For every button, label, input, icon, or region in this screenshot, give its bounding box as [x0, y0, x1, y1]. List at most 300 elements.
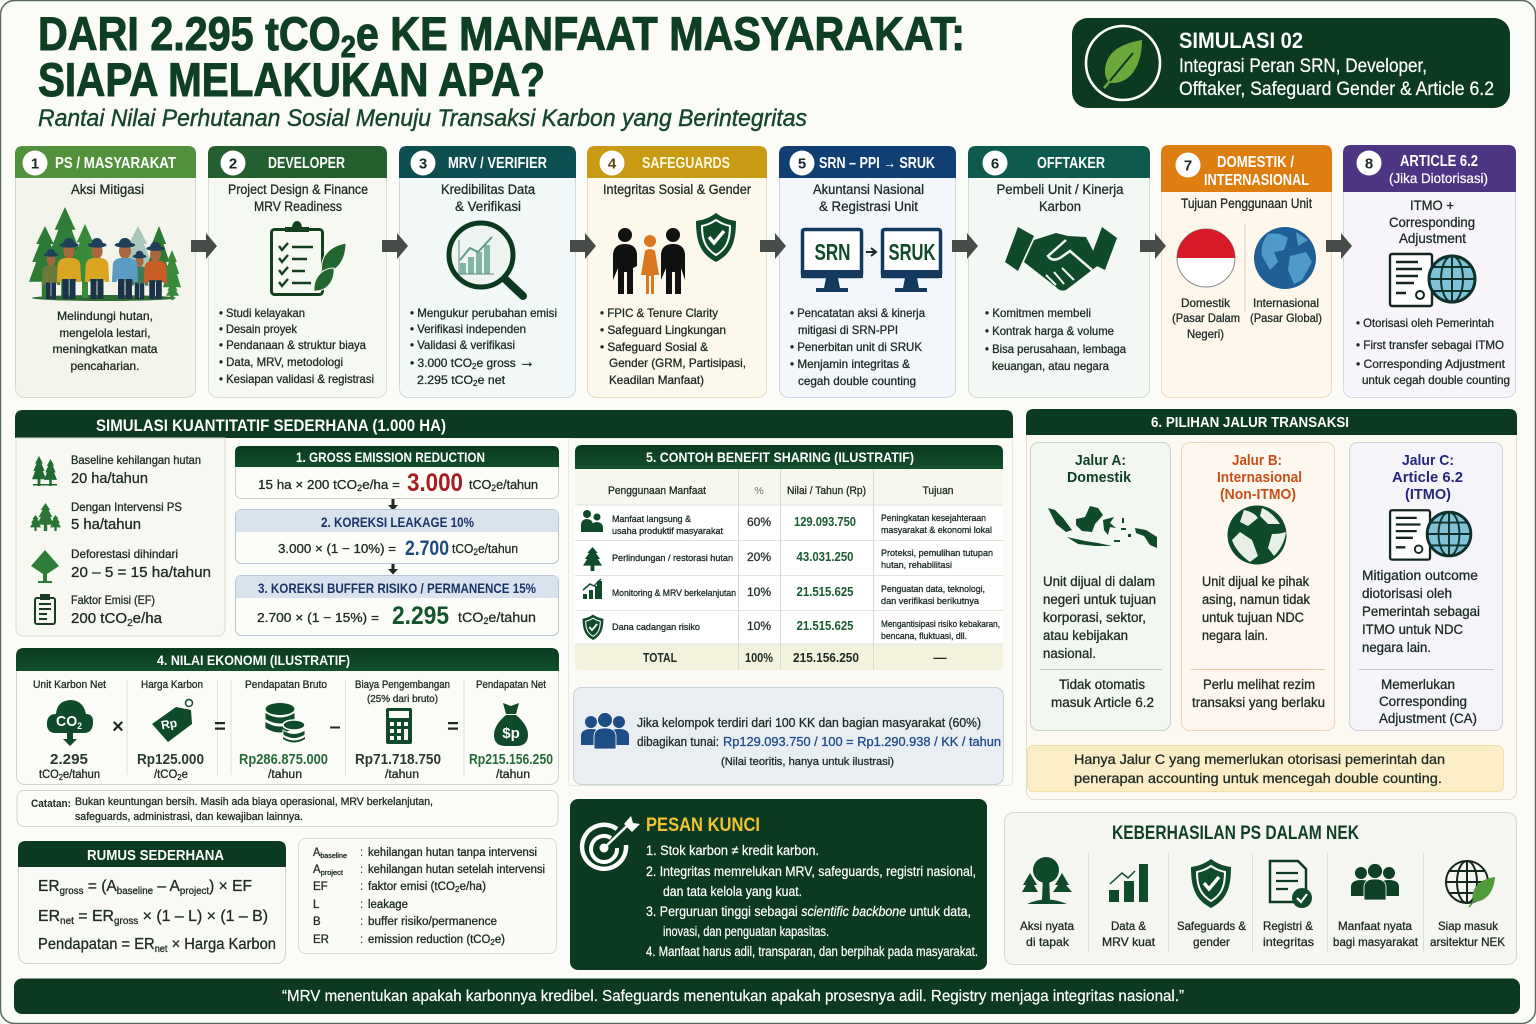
panel: 3 MRV / Verifier: & Verifikasi — [455, 199, 521, 214]
table: benefit sharing: 215.156.250 — [793, 650, 859, 665]
table: benefit sharing: masyarakat & ekonomi lokal — [881, 525, 992, 536]
table: benefit sharing: % — [754, 485, 764, 497]
arrow — [388, 564, 398, 574]
card: jalur A: Tidak otomatis — [1059, 677, 1145, 692]
panel: 2 koreksi leakage: e/tahun — [478, 541, 518, 556]
panel: keberhasilan PS dalam NEK: gender — [1193, 935, 1230, 949]
panel: input data: Deforestasi dihindari — [71, 547, 178, 561]
panel: 2 koreksi leakage: 2.700 — [405, 537, 449, 560]
panel: legenda rumus: e) — [495, 934, 505, 946]
panel: keberhasilan PS dalam NEK: KEBERHASILAN PS DALAM NEK — [1112, 823, 1359, 844]
callout: catatan: Catatan: — [31, 798, 71, 810]
panel: 2 Developer: • Desain proyek — [219, 322, 298, 336]
card: jalur C: diotorisasi oleh — [1362, 586, 1452, 601]
operators: = — [214, 716, 226, 738]
panel: 4 Safeguards: • Safeguard Sosial & — [600, 340, 708, 354]
panel: legenda rumus: project — [321, 868, 344, 877]
panel: 4 nilai ekonomi: 2 — [177, 773, 182, 782]
panel: 1 gross emission reduction: tCO — [469, 477, 492, 492]
panel: 4 nilai ekonomi: 2.295 — [50, 751, 88, 768]
panel: legenda rumus: L — [313, 899, 320, 911]
callout: hanya jalur C: Hanya Jalur C yang memerlukan otorisasi pemerintah dan — [1074, 751, 1445, 767]
panel: rumus sederhana: ER — [38, 878, 60, 895]
panel: 1 PS / Masyarakat: Melindungi hutan, — [57, 309, 153, 323]
panel: 3 MRV / Verifier — [399, 146, 576, 398]
callout: catatan: safeguards, administrasi, dan kewajiban lainnya. — [75, 811, 303, 823]
table: benefit sharing: Nilai / Tahun (Rp) — [787, 485, 866, 497]
panel: 3 MRV / Verifier: 2 — [473, 379, 478, 388]
card: jalur C: (ITMO) — [1405, 486, 1451, 503]
card: jalur A: Unit dijual di dalam — [1043, 574, 1155, 589]
table: benefit sharing: 10% — [747, 585, 771, 599]
card: jalur B: (Non-ITMO) — [1220, 486, 1296, 503]
panel: 6 Offtaker: OFFTAKER — [1037, 155, 1105, 172]
heading: pilihan jalur — [1026, 409, 1517, 435]
panel: 3 koreksi buffer — [236, 576, 558, 636]
icon: target — [582, 816, 640, 869]
table: benefit sharing — [575, 469, 1003, 670]
panel: rumus sederhana: = (A — [83, 878, 117, 895]
icon: SRN to SRUK monitors: SRUK — [888, 239, 936, 265]
panel: 3 MRV / Verifier: e net — [478, 373, 506, 387]
table: benefit sharing: hutan, rehabilitasi — [881, 560, 952, 571]
panel: 4 nilai ekonomi: /tahun — [268, 769, 302, 781]
badge: simulasi 02: Integrasi Peran SRN, Developer, — [1179, 56, 1427, 77]
panel: 1 PS / Masyarakat: meningkatkan mata — [52, 342, 158, 356]
panel: legenda rumus: : — [360, 934, 363, 946]
panel: 8 Article 6.2: ARTICLE 6.2 — [1400, 153, 1478, 170]
panel: 6 pilihan jalur transaksi — [1026, 409, 1517, 800]
icon: globe — [1228, 506, 1286, 564]
panel: input data: 200 tCO — [71, 610, 127, 627]
panel: 1 gross emission reduction: 1. GROSS EMISSION REDUCTION — [296, 449, 485, 465]
panel: 4 nilai ekonomi: Unit Karbon Net — [33, 679, 106, 691]
icon: magnifier with chart — [449, 223, 523, 296]
panel: legenda rumus: 2 — [490, 938, 495, 947]
panel: rumus sederhana: project — [180, 886, 209, 897]
panel: 2 Developer: • Pendanaan & struktur biaya — [219, 338, 366, 352]
table: benefit sharing: Penguatan data, teknologi, — [881, 584, 985, 595]
icon: document with globe — [1390, 254, 1475, 306]
panel: 3 MRV / Verifier: → — [519, 354, 535, 371]
section heading: simulasi kuantitatif: SIMULASI KUANTITATIF SEDERHANA (1.000 HA) — [96, 416, 446, 435]
panel: 8 Article 6.2: (Jika Diotorisasi) — [1389, 170, 1488, 186]
panel: 4 nilai ekonomi: Pendapatan Bruto — [245, 679, 327, 691]
callout: catatan — [17, 790, 558, 826]
table: benefit sharing: usaha produktif masyarakat — [612, 526, 723, 537]
card: jalur A: Domestik — [1067, 469, 1132, 486]
panel: benefit sharing container — [568, 438, 1012, 786]
panel: 4 nilai ekonomi: tCO — [39, 769, 59, 781]
panel: 8 Article 6.2: 8 — [1365, 156, 1373, 172]
panel: 3 koreksi buffer: 2.295 — [392, 602, 449, 630]
panel: legenda rumus: : — [360, 864, 363, 876]
panel: 1 gross emission reduction: 3.000 — [407, 469, 463, 497]
panel: 4 nilai ekonomi: Biaya Pengembangan — [355, 679, 450, 691]
icon: CO2 cloud: CO — [56, 713, 78, 730]
card: jalur A: Jalur A: — [1075, 452, 1126, 469]
panel: legenda rumus: buffer risiko/permanence — [368, 916, 497, 928]
panel: 1 PS / Masyarakat: pencaharian. — [70, 359, 140, 373]
callout: 100 KK: Jika kelompok terdiri dari 100 KK dan bagian masyarakat (60%) — [637, 715, 981, 730]
panel: pesan kunci: inovasi, dan penguatan kapasitas. — [663, 924, 829, 939]
panel: keberhasilan PS dalam NEK — [1004, 812, 1516, 964]
panel: 1 gross emission reduction: 15 ha × 200 tCO — [258, 477, 354, 492]
table: benefit sharing: 60% — [747, 515, 771, 529]
panel: keberhasilan PS dalam NEK: arsitektur NEK — [1430, 935, 1505, 949]
icon: SRN to SRUK monitors: SRN — [814, 239, 850, 265]
panel: 3 MRV / Verifier: e gross — [476, 356, 519, 370]
panel: 8 Article 6.2: • Otorisasi oleh Pemerintah — [1356, 316, 1494, 330]
panel: keberhasilan PS dalam NEK: Aksi nyata — [1020, 919, 1074, 933]
callout: 100 KK: Rp129.093.750 / 100 = Rp1.290.938 / KK / tahun — [723, 734, 1001, 749]
panel: legenda rumus: ER — [313, 934, 329, 946]
panel: 3 koreksi buffer: 3. KOREKSI BUFFER RISIKO / PERMANENCE 15% — [258, 580, 536, 596]
icon: twin trees — [32, 456, 57, 486]
panel: 2 Developer: MRV Readiness — [254, 199, 342, 214]
icon: handshake — [1005, 227, 1117, 291]
panel: 1 PS / Masyarakat: Aksi Mitigasi — [71, 182, 144, 197]
card: jalur C: negara lain. — [1362, 640, 1431, 655]
card: jalur A — [1030, 442, 1170, 730]
icon: family group — [581, 712, 629, 749]
card: jalur C: Memerlukan — [1381, 677, 1455, 692]
panel: 1 gross emission reduction: 2 — [357, 483, 362, 493]
title: SIAPA MELAKUKAN APA? — [38, 53, 545, 106]
panel: 3 koreksi buffer: 2.700 × (1 − 15%) = — [257, 610, 379, 625]
card: jalur C: Jalur C: — [1402, 452, 1454, 469]
panel: 4 Safeguards: Gender (GRM, Partisipasi, — [609, 356, 746, 370]
panel: 6 Offtaker: Pembeli Unit / Kinerja — [996, 182, 1124, 197]
panel: keberhasilan PS dalam NEK: di tapak — [1026, 935, 1070, 949]
panel: 6 Offtaker: keuangan, atau negara — [992, 359, 1109, 373]
card: jalur B: untuk tujuan NDC — [1202, 610, 1304, 625]
panel: input data: Faktor Emisi (EF) — [71, 593, 155, 607]
heading: 5 contoh benefit sharing — [575, 445, 1003, 469]
icon: checklist clipboard with leaf — [272, 221, 346, 294]
icon: trees — [1022, 857, 1072, 904]
icon: price tag: Rp — [160, 716, 178, 732]
panel: 4 nilai ekonomi: e — [182, 769, 188, 781]
card: jalur A: nasional. — [1043, 646, 1096, 661]
panel: 8 Article 6.2 — [1343, 145, 1516, 398]
arrow — [388, 499, 398, 510]
icon: community with forest — [29, 207, 181, 301]
panel: 1 PS / Masyarakat: PS / MASYARAKAT — [55, 155, 176, 172]
icon: forest — [30, 503, 61, 531]
table: benefit sharing: Penggunaan Manfaat — [608, 485, 706, 497]
panel: 8 Article 6.2: ITMO + — [1410, 197, 1454, 213]
callout: 100 KK: dibagikan tunai: — [637, 734, 719, 749]
panel: legenda rumus: kehilangan hutan tanpa intervensi — [368, 847, 537, 859]
panel: 5 SRN-PPI to SRUK: cegah double counting — [798, 374, 916, 388]
panel: 1 gross emission reduction — [235, 446, 559, 498]
panel: legenda rumus: A — [313, 864, 321, 876]
card: jalur A: masuk Article 6.2 — [1051, 695, 1154, 710]
panel: 5 SRN-PPI to SRUK: • Menjamin integritas & — [790, 357, 910, 371]
panel: legenda rumus: emission reduction (tCO — [368, 934, 491, 946]
card: jalur B: Unit dijual ke pihak — [1202, 574, 1309, 589]
panel: legenda rumus: : — [360, 847, 363, 859]
panel: 2 Developer: • Studi kelayakan — [219, 306, 305, 320]
card: jalur B: Jalur B: — [1232, 452, 1282, 469]
panel: 7 Domestik / Internasional: (Pasar Dalam — [1172, 311, 1240, 325]
panel: input data: 5 ha/tahun — [71, 516, 141, 533]
table: benefit sharing: 100% — [745, 650, 773, 665]
badge: simulasi 02: Offtaker, Safeguard Gender & Article 6.2 — [1179, 79, 1494, 100]
panel: 7 Domestik / Internasional: DOMESTIK / — [1217, 154, 1294, 171]
panel: rumus sederhana — [18, 841, 286, 964]
panel: 2 Developer: Project Design & Finance — [228, 182, 368, 197]
icon: people — [581, 510, 603, 532]
icon: shield — [583, 615, 603, 640]
panel: input data: 20 ha/tahun — [71, 470, 148, 487]
card: jalur B: Internasional — [1217, 469, 1302, 486]
panel: 5 SRN-PPI to SRUK: mitigasi di SRN-PPI — [798, 323, 898, 337]
panel: legenda rumus: 2 — [455, 885, 460, 894]
panel: 5 SRN-PPI to SRUK: • Penerbitan unit di SRUK — [790, 340, 922, 354]
panel: 4 Safeguards: Integritas Sosial & Gender — [603, 182, 751, 197]
card: jalur C: Mitigation outcome — [1362, 568, 1478, 583]
panel: 5 SRN-PPI to SRUK: • Pencatatan aksi & kinerja — [790, 306, 925, 320]
panel: 7 Domestik / Internasional: Internasional — [1253, 296, 1319, 310]
card: jalur A: korporasi, sektor, — [1043, 610, 1146, 625]
panel: 2 koreksi leakage: 3.000 × (1 − 10%) = — [278, 541, 396, 556]
panel: 1 gross emission reduction: 2 — [491, 483, 496, 493]
panel: 3 MRV / Verifier: • Mengukur perubahan emisi — [410, 306, 557, 320]
panel: 6 Offtaker: 6 — [991, 156, 999, 172]
panel: 3 MRV / Verifier: 2 — [472, 362, 477, 371]
panel: 2 koreksi leakage: 2 — [473, 547, 478, 557]
table: benefit sharing: Perlindungan / restorasi hutan — [612, 553, 733, 564]
table: benefit sharing: Monitoring & MRV berkelanjutan — [612, 588, 736, 599]
card: jalur B — [1182, 442, 1334, 730]
table: benefit sharing: — — [934, 650, 946, 665]
table: benefit sharing: Tujuan — [922, 485, 954, 497]
panel: 4 nilai ekonomi: /tahun — [496, 769, 530, 781]
icon: map of Indonesia — [1048, 506, 1157, 548]
panel: pesan kunci: 2. Integritas memrelukan MRV, safeguards, registri nasional, — [646, 864, 976, 879]
panel: 4 nilai ekonomi: Harga Karbon — [141, 679, 203, 691]
panel: 7 Domestik / Internasional: INTERNASIONAL — [1204, 172, 1309, 189]
panel: legenda rumus: : — [360, 899, 363, 911]
card: jalur C: Article 6.2 — [1392, 469, 1463, 486]
callout: hanya jalur C — [1028, 746, 1504, 792]
panel: 2 koreksi leakage: 2. KOREKSI LEAKAGE 10% — [321, 514, 474, 530]
panel: 8 Article 6.2: Adjustment — [1399, 230, 1466, 246]
icon: calculator — [386, 708, 412, 744]
quote bar — [14, 978, 1520, 1014]
panel: pesan kunci: dan tata kelola yang kuat. — [663, 884, 802, 899]
panel: rumus sederhana: = ER — [74, 908, 114, 925]
panel: 6 Offtaker — [968, 146, 1150, 398]
card: jalur B: transaksi yang berlaku — [1192, 695, 1325, 710]
subtitle: Rantai Nilai Perhutanan Sosial Menuju Transaksi Karbon yang Berintegritas — [38, 105, 807, 132]
panel: pesan kunci — [570, 799, 987, 970]
panel: rumus sederhana: gross — [114, 916, 138, 927]
panel: input data: Dengan Intervensi PS — [71, 500, 182, 514]
panel: 3 MRV / Verifier: • Validasi & verifikasi — [410, 338, 515, 352]
panel: 1 PS / Masyarakat: mengelola lestari, — [60, 326, 150, 340]
panel: 2 koreksi leakage — [236, 510, 558, 564]
panel: input data — [16, 438, 225, 636]
icon: globe with leaf — [1446, 861, 1495, 907]
panel: 2 Developer: • Kesiapan validasi & registrasi — [219, 372, 374, 386]
icon: globe — [1254, 227, 1316, 289]
panel: pesan kunci: 3. Perguruan tinggi sebagai scientific backbone untuk data, — [646, 904, 971, 919]
panel: keberhasilan PS dalam NEK: Registri & — [1263, 919, 1313, 933]
icon: shield — [1191, 859, 1231, 908]
table: benefit sharing: 21.515.625 — [796, 585, 854, 599]
card: jalur C: Pemerintah sebagai — [1362, 604, 1480, 619]
panel: 5 SRN-PPI to SRUK: SRN – PPI → SRUK — [819, 155, 935, 172]
panel: legenda rumus: baseline — [320, 851, 347, 860]
title — [38, 7, 965, 106]
panel: 4 nilai ekonomi: /tCO — [154, 769, 178, 781]
operators: – — [329, 716, 341, 738]
title: 2 — [341, 29, 356, 64]
panel: input data: e/ha — [133, 610, 163, 627]
heading: 5 contoh benefit sharing: 5. CONTOH BENEFIT SHARING (ILUSTRATIF) — [646, 449, 914, 465]
panel: 3 MRV / Verifier: 2.295 tCO — [417, 373, 472, 387]
panel: legenda rumus: : — [360, 881, 363, 893]
icon: people — [1351, 864, 1399, 900]
panel: 4 nilai ekonomi: e/tahun — [63, 769, 100, 781]
panel: rumus sederhana: net — [60, 916, 74, 927]
panel: 4 nilai ekonomi: Rp215.156.250 — [469, 751, 553, 768]
table: benefit sharing: Peningkatan kesejahteraan — [881, 513, 986, 524]
panel: keberhasilan PS dalam NEK: Siap masuk — [1438, 919, 1499, 933]
table: benefit sharing: 129.093.750 — [794, 515, 856, 529]
panel: 5 SRN-PPI to SRUK: & Registrasi Unit — [819, 199, 918, 214]
panel: pesan kunci: 4. Manfaat harus adil, transparan, dan berpihak pada masyarakat. — [646, 944, 978, 959]
panel: input data: 2 — [127, 618, 133, 629]
panel: 3 MRV / Verifier: • 3.000 tCO — [410, 356, 472, 370]
panel: rumus sederhana: ER — [38, 908, 60, 925]
panel: legenda rumus: : — [360, 916, 363, 928]
panel: 4 nilai ekonomi: Pendapatan Net — [476, 679, 546, 691]
panel: keberhasilan PS dalam NEK: bagi masyarakat — [1333, 935, 1419, 949]
panel: 4 Safeguards — [587, 146, 767, 398]
badge: simulasi 02 — [1072, 18, 1510, 108]
panel: 2 Developer: • Data, MRV, metodologi — [219, 355, 343, 369]
callout: 100 KK: (Nilai teoritis, hanya untuk ilustrasi) — [721, 756, 894, 768]
table: benefit sharing: TOTAL — [643, 650, 677, 665]
panel: 3 koreksi buffer: e/tahun — [488, 609, 536, 625]
panel: rumus sederhana: × (1 – L) × (1 – B) — [138, 908, 268, 925]
panel: rumus sederhana: gross — [60, 886, 83, 897]
card: jalur C — [1350, 442, 1502, 730]
panel: legenda rumus — [298, 838, 556, 954]
panel: 4 nilai ekonomi: Rp125.000 — [137, 751, 204, 768]
table: benefit sharing: dan verifikasi berikutnya — [881, 596, 980, 607]
title: DARI 2.295 tCO — [38, 7, 383, 60]
panel: 8 Article 6.2: untuk cegah double counting — [1362, 373, 1510, 387]
panel: rumus sederhana: RUMUS SEDERHANA — [87, 847, 224, 864]
panel: 4 nilai ekonomi: /tahun — [385, 769, 419, 781]
panel: rumus sederhana: Pendapatan = ER — [38, 936, 165, 953]
table: benefit sharing: bencana, fluktuasi, dll. — [881, 631, 967, 642]
card: jalur A: atau kebijakan — [1043, 628, 1128, 643]
panel: 3 MRV / Verifier: • Verifikasi independen — [410, 322, 526, 336]
card: jalur B: negara lain. — [1202, 628, 1268, 643]
panel: pesan kunci: PESAN KUNCI — [646, 815, 760, 836]
panel: legenda rumus: A — [313, 847, 321, 859]
panel: 8 Article 6.2: Corresponding — [1389, 214, 1475, 230]
icon: money bag: $p — [502, 725, 520, 742]
panel: 3 koreksi buffer: tCO — [458, 609, 483, 625]
card: jalur C: ITMO untuk NDC — [1362, 622, 1463, 637]
icon: coins — [266, 703, 305, 742]
table: benefit sharing: Mengantisipasi risiko kebakaran, — [881, 619, 1000, 630]
panel: 3 MRV / Verifier: 3 — [419, 156, 427, 172]
panel: 4 nilai ekonomi: Rp286.875.000 — [239, 751, 328, 768]
panel: 3 MRV / Verifier: Kredibilitas Data — [441, 182, 535, 197]
panel: 7 Domestik / Internasional: Negeri) — [1187, 327, 1224, 341]
icon: price tag — [152, 700, 192, 742]
panel: 4 nilai ekonomi: Rp71.718.750 — [355, 751, 441, 768]
panel: legenda rumus: e/ha) — [460, 881, 486, 893]
panel: input data: Baseline kehilangan hutan — [71, 453, 201, 467]
panel: 4 Safeguards: Keadilan Manfaat) — [609, 373, 704, 387]
panel: rumus sederhana: baseline — [117, 886, 153, 897]
panel: 5 SRN-PPI to SRUK: Akuntansi Nasional — [813, 182, 924, 197]
panel: 1 PS / Masyarakat — [15, 146, 196, 398]
operators: = — [447, 716, 459, 738]
panel: 6 Offtaker: • Komitmen membeli — [985, 306, 1091, 320]
panel: 7 Domestik / Internasional: (Pasar Global) — [1250, 311, 1322, 325]
panel: 2 Developer — [208, 146, 387, 398]
panel: 4 Safeguards: • Safeguard Lingkungan — [600, 323, 726, 337]
panel: 4 Safeguards: • FPIC & Tenure Clarity — [600, 306, 718, 320]
icon: clipboard — [35, 595, 55, 624]
icon: registry document — [1270, 861, 1312, 908]
panel: 2 Developer: 2 — [229, 156, 237, 172]
panel: legenda rumus: EF — [313, 881, 328, 893]
icon: bar chart — [1109, 864, 1148, 902]
heading: pilihan jalur: 6. PILIHAN JALUR TRANSAKSI — [1151, 414, 1349, 431]
table: benefit sharing: Dana cadangan risiko — [612, 622, 700, 633]
panel: 1 gross emission reduction: e/tahun — [496, 477, 538, 492]
panel: 2 Developer: DEVELOPER — [268, 155, 345, 172]
panel: 4 nilai ekonomi — [16, 648, 559, 784]
panel: keberhasilan PS dalam NEK: integritas — [1263, 935, 1314, 949]
panel: input data: 20 – 5 = 15 ha/tahun — [71, 564, 211, 581]
panel: 2 koreksi leakage: tCO — [452, 541, 475, 556]
panel: 6 Offtaker: • Bisa perusahaan, lembaga — [985, 342, 1126, 356]
icon: money bag — [494, 703, 528, 746]
panel: legenda rumus: B — [313, 916, 321, 928]
operators: × — [112, 716, 124, 738]
icon: tree — [31, 550, 59, 583]
panel: pesan kunci: 1. Stok karbon ≠ kredit karbon. — [646, 843, 819, 858]
panel: 3 MRV / Verifier: MRV / VERIFIER — [448, 155, 547, 172]
panel: legenda rumus: faktor emisi (tCO — [368, 881, 454, 893]
badge: simulasi 02: SIMULASI 02 — [1179, 28, 1303, 53]
panel: 4 nilai ekonomi: (25% dari bruto) — [367, 693, 438, 705]
table: benefit sharing: 21.515.625 — [796, 619, 854, 633]
panel: 5 SRN-PPI to SRUK — [779, 146, 956, 398]
panel: rumus sederhana: × Harga Karbon — [168, 936, 276, 953]
panel: 4 Safeguards: 4 — [608, 156, 617, 172]
panel: 7 Domestik / Internasional — [1161, 145, 1332, 398]
icon: SRN to SRUK monitors — [801, 230, 942, 292]
panel: keberhasilan PS dalam NEK: Manfaat nyata — [1338, 919, 1412, 933]
operators — [112, 716, 459, 738]
panel: keberhasilan PS dalam NEK: Safeguards & — [1177, 919, 1246, 933]
panel: 4 nilai ekonomi: 4. NILAI EKONOMI (ILUSTRATIF) — [157, 652, 350, 668]
panel: 7 Domestik / Internasional: Domestik — [1181, 296, 1231, 310]
